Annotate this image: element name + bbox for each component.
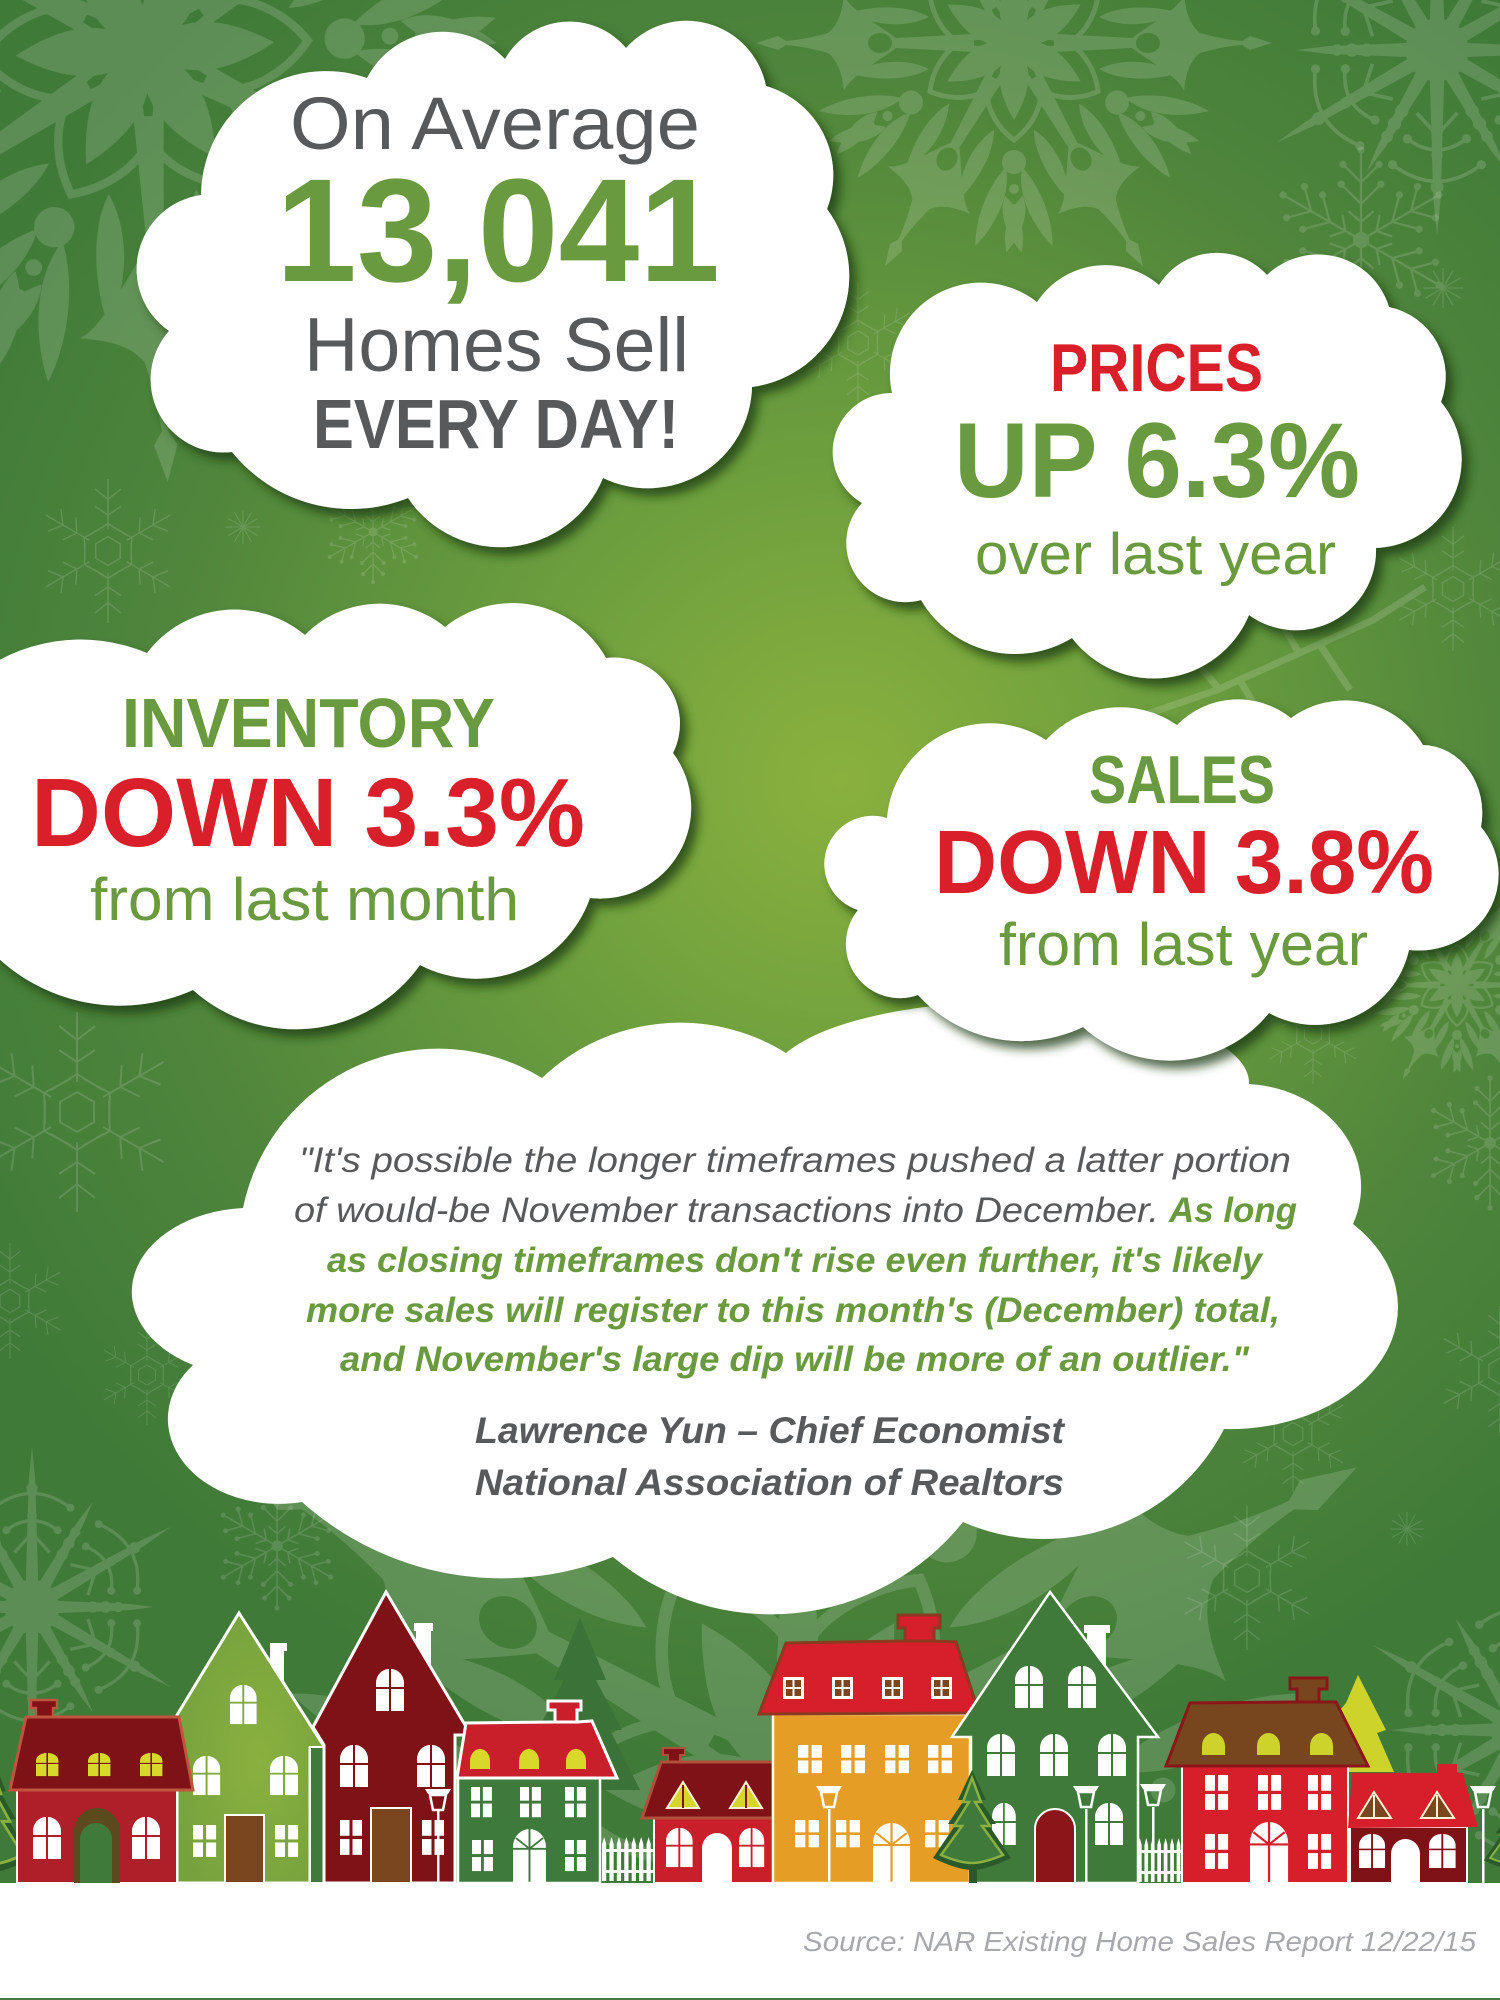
background pine tree: [520, 1618, 640, 1790]
cloud: inventory down 3.3%: [0, 603, 691, 1029]
house: light green gabled: [177, 1613, 325, 1883]
right street lamp: [1470, 1786, 1496, 1883]
yellow pine tree behind brown-roof house: [1340, 1675, 1394, 1772]
cloud: prices up 6.3%: [833, 253, 1462, 679]
decorative fine snowflakes: [0, 146, 1500, 1650]
quote attribution: Lawrence Yun – Chief Economist: [475, 1410, 1066, 1451]
cloud: inventory down 3.3%: from last month: [90, 866, 519, 933]
cloud: sales down 3.8%: SALES: [1089, 742, 1275, 818]
house: red body, dark red roof small: [642, 1748, 773, 1883]
house: dark red tall gabled: [313, 1592, 471, 1883]
left edge tree: [0, 1757, 31, 1872]
source note: Source: NAR Existing Home Sales Report 12/22/15: [803, 1926, 1476, 1957]
cloud: prices up 6.3%: UP 6.3%: [954, 400, 1360, 520]
center pine tree: [933, 1770, 1011, 1883]
quote attribution: [475, 1410, 1066, 1503]
house: red body, brown roof: [1166, 1678, 1368, 1883]
cloud: inventory down 3.3%: DOWN 3.3%: [31, 758, 585, 867]
quote text: "It's possible the longer timeframes pushed a latter portion: [299, 1141, 1291, 1180]
cloud: prices up 6.3%: PRICES: [1050, 330, 1263, 406]
quote text: more sales will register to this month's (December) total,: [306, 1291, 1280, 1330]
cloud: sales down 3.8%: [824, 699, 1499, 1061]
quote text: [294, 1141, 1297, 1379]
cloud: 13,041 homes sell every day: EVERY DAY!: [313, 385, 679, 463]
cloud: 13,041 homes sell every day: 13,041: [276, 149, 720, 313]
cloud: sales down 3.8%: DOWN 3.8%: [934, 813, 1434, 913]
cloud: sales down 3.8%: from last year: [999, 911, 1368, 978]
cloud: 13,041 homes sell every day: Homes Sell: [304, 303, 689, 388]
picket fence: [602, 1837, 653, 1881]
house: small dark red body, red roof: [1348, 1764, 1478, 1883]
footer bottom rule: [0, 1998, 1500, 2000]
house: green gabled with three window rows: [952, 1592, 1158, 1883]
quote text: As long: [1168, 1191, 1297, 1230]
cloud: prices up 6.3%: over last year: [975, 522, 1336, 587]
street lamp and fence: [1138, 1784, 1182, 1882]
quote text: and November's large dip will be more of an outlier.": [340, 1340, 1249, 1379]
house row: [0, 1592, 1500, 1883]
quote attribution: National Association of Realtors: [475, 1462, 1064, 1503]
cloud: inventory down 3.3%: INVENTORY: [122, 684, 495, 762]
house: dark red roof, red body: [10, 1700, 193, 1883]
quote text: as closing timeframes don't rise even further, it's likely: [327, 1241, 1264, 1280]
cloud: 13,041 homes sell every day: [137, 21, 849, 547]
quote text: of would-be November transactions into December.: [294, 1191, 1159, 1230]
footer white band: [0, 1883, 1500, 1998]
house: green body, red roof: [457, 1701, 617, 1883]
right edge tree: [1484, 1790, 1500, 1870]
house: orange body, red roof: [759, 1615, 979, 1883]
quote cloud: [132, 1002, 1398, 1614]
cloud: 13,041 homes sell every day: On Average: [290, 82, 700, 165]
